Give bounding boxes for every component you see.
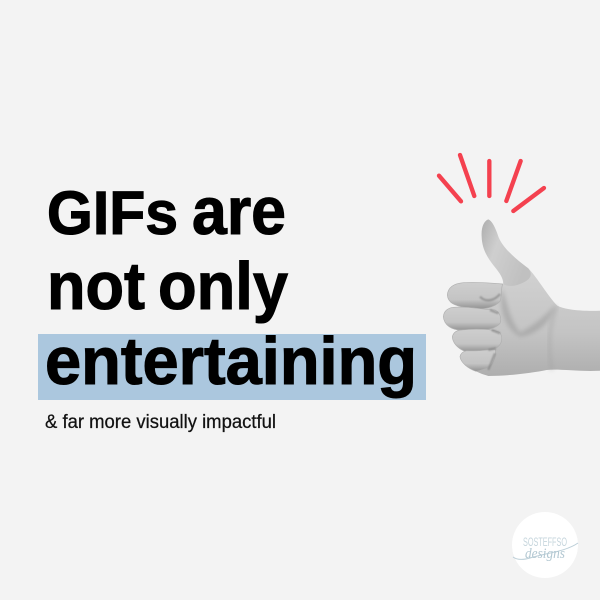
title: only [158, 249, 288, 324]
logo badge: SOSTEFFSO [523, 535, 567, 549]
subtitle: & far more visually impactful [45, 412, 276, 433]
little finger [460, 349, 495, 371]
thumb [482, 219, 531, 286]
icon: thumbs-up hand [443, 219, 600, 376]
highlight bar [38, 334, 426, 400]
logo badge: designs [525, 546, 565, 562]
wrist crease [550, 307, 557, 370]
icon: red emphasis rays [439, 155, 544, 211]
logo badge [512, 512, 578, 578]
title: entertaining [45, 324, 417, 399]
middle finger [443, 307, 501, 330]
title: GIFs [47, 179, 178, 247]
index finger [447, 282, 503, 309]
arm and palm [470, 267, 600, 376]
title: are [192, 174, 286, 249]
palm shadow [501, 288, 555, 337]
title [45, 174, 417, 399]
ring finger [452, 329, 502, 352]
finger shadow [480, 294, 500, 370]
title: not [47, 249, 145, 324]
